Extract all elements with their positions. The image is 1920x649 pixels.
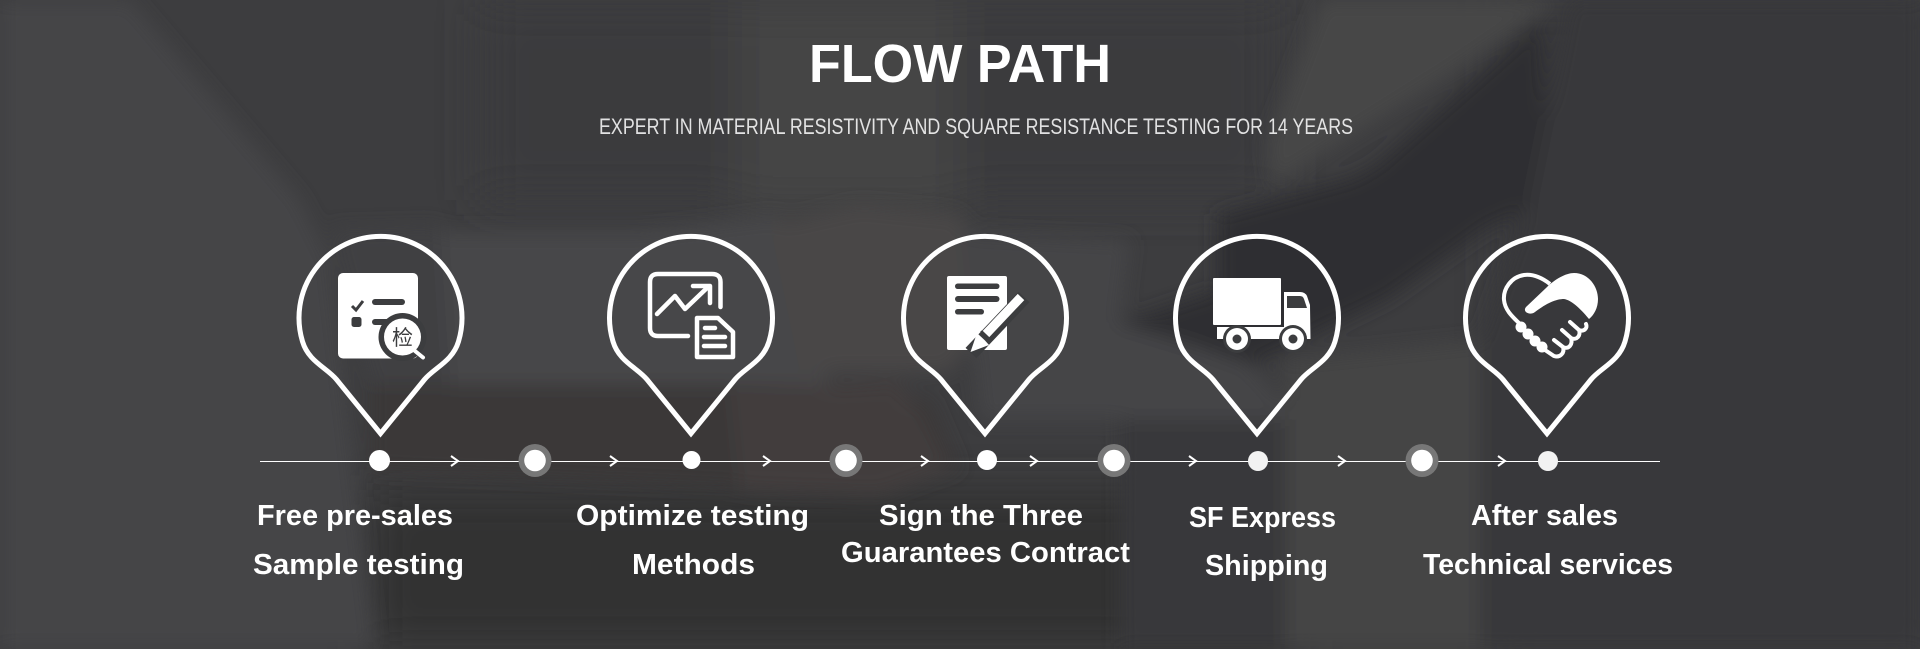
label [1189,502,1336,582]
label [576,500,809,581]
label [841,500,1130,569]
label: Guarantees Contract [841,537,1130,569]
label: Free pre-sales [257,500,453,532]
icon: contract and pen [947,276,1024,353]
label: Sample testing [253,549,464,581]
pin outline [610,236,772,434]
subtitle: EXPERT IN MATERIAL RESISTIVITY AND SQUARE RESISTANCE TESTING FOR 14 YEARS [599,114,1353,139]
label: Methods [632,549,755,581]
pin outline [1176,236,1338,434]
label: Optimize testing [576,500,809,532]
label: Shipping [1205,550,1328,582]
pin outline [299,236,462,434]
title: FLOW PATH [809,34,1111,94]
step 5: after sales technical services [1423,236,1673,581]
step 3: sign contract [841,236,1130,569]
timeline line with dots and arrows [260,444,1660,477]
arrows along timeline [451,456,1505,466]
label [1423,500,1673,581]
label: After sales [1471,500,1618,532]
icon: truck [1213,278,1310,353]
icon: chart with document [650,274,733,357]
icon: checklist with magnifier [338,273,426,361]
label: Sign the Three [879,500,1083,532]
step 1: free pre-sales [253,236,464,581]
icon: handshake heart [1504,273,1598,356]
pin outline [904,236,1066,434]
label: SF Express [1189,502,1336,534]
label: Technical services [1423,549,1673,581]
label [253,500,464,581]
icon: checklist with magnifier: 检 [392,327,413,350]
pin outline [1466,236,1628,434]
ringed connector dots [518,444,1438,477]
step 2: optimize testing methods [576,236,809,581]
step dots [369,450,1558,471]
step 4: SF Express shipping [1176,236,1338,582]
